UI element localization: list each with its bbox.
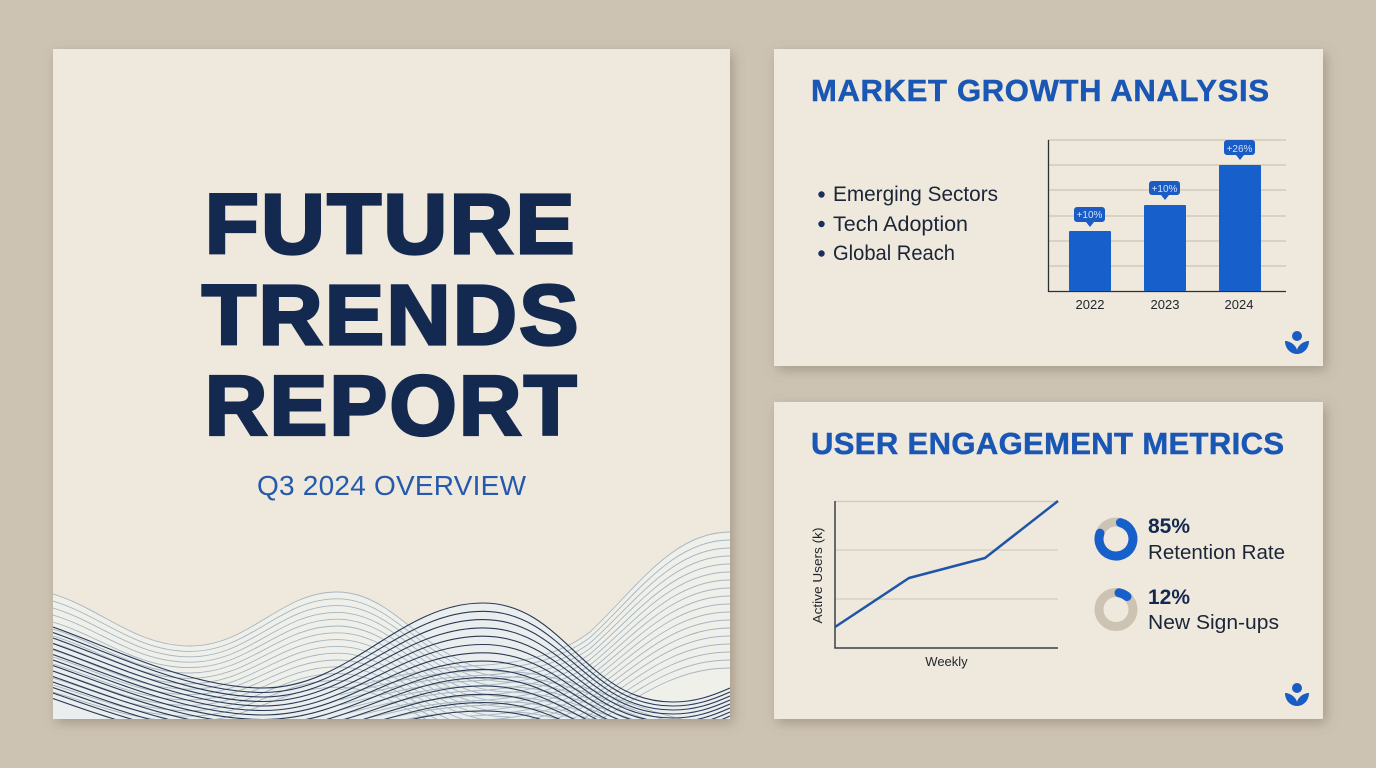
bar chart bbox=[1048, 140, 1286, 312]
year labels: 2024 bbox=[1225, 297, 1253, 312]
axis label: y: Active Users (k) bbox=[810, 528, 825, 624]
heading: MARKET GROWTH ANALYSIS bbox=[811, 73, 1269, 108]
axis label: x: Weekly bbox=[925, 654, 968, 669]
title: TRENDS bbox=[202, 268, 581, 362]
metric: new sign-ups: 12% bbox=[1148, 586, 1190, 609]
line chart bbox=[810, 501, 1058, 669]
metric: retention rate: Retention Rate bbox=[1148, 542, 1285, 564]
bullet list: Global Reach bbox=[833, 242, 955, 265]
metric: new sign-ups bbox=[1099, 586, 1279, 634]
heading: USER ENGAGEMENT METRICS bbox=[811, 426, 1284, 461]
wave line art bbox=[53, 532, 730, 719]
title bbox=[202, 177, 581, 452]
year labels: 2023 bbox=[1151, 297, 1179, 312]
panel: market growth analysis bbox=[774, 49, 1323, 366]
value badges bbox=[1074, 140, 1255, 227]
year labels: 2022 bbox=[1076, 297, 1104, 312]
metric: retention rate: 85% bbox=[1148, 515, 1190, 538]
year labels bbox=[1076, 297, 1253, 312]
metric: retention rate bbox=[1099, 515, 1285, 564]
value badges: +10% bbox=[1077, 210, 1103, 221]
panel: title cover bbox=[53, 49, 730, 765]
value badges: +26% bbox=[1227, 144, 1253, 155]
panel: user engagement metrics bbox=[774, 402, 1323, 719]
bullet list bbox=[818, 183, 998, 265]
metric: new sign-ups: New Sign-ups bbox=[1148, 612, 1279, 634]
subtitle: Q3 2024 OVERVIEW bbox=[257, 470, 527, 501]
bullet list: Tech Adoption bbox=[833, 213, 968, 236]
icon: logo bbox=[1285, 683, 1309, 706]
bullet list: Emerging Sectors bbox=[833, 183, 998, 206]
title: REPORT bbox=[205, 358, 579, 452]
value badges: +10% bbox=[1152, 184, 1178, 195]
title: FUTURE bbox=[205, 177, 577, 271]
icon: logo bbox=[1285, 331, 1309, 354]
